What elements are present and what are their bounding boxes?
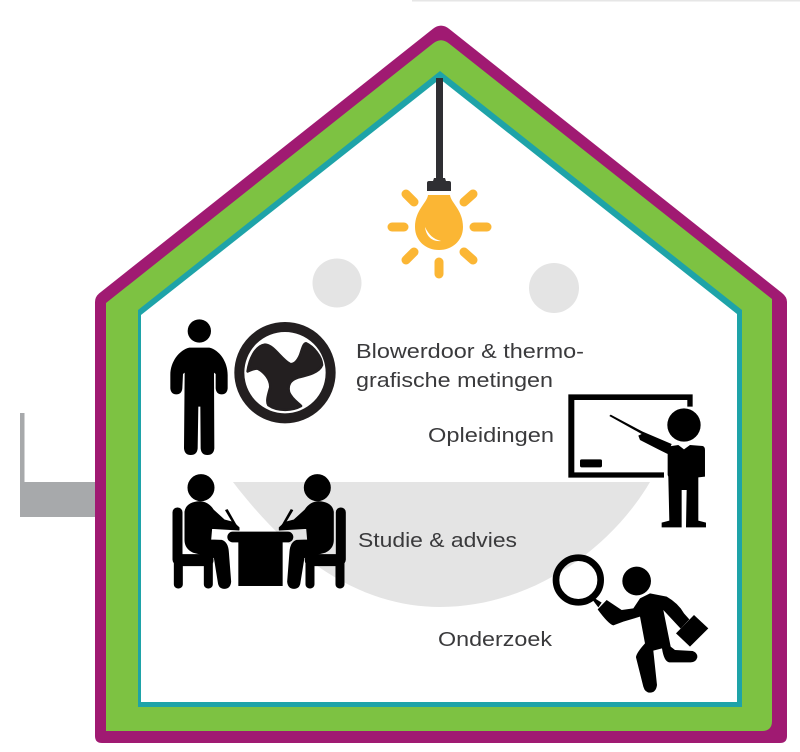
house frame: teal inner layer	[138, 71, 742, 707]
left seated person	[173, 475, 239, 588]
icon: teacher at board	[568, 394, 706, 527]
icon: two people at a table	[173, 475, 345, 588]
icon: blower door fan	[239, 327, 331, 418]
label: grafische metingen: grafische metingen	[356, 369, 553, 392]
label: Blowerdoor: Blowerdoor & thermo-	[356, 340, 584, 363]
grey connector pipe	[20, 413, 96, 517]
grey decorative circle left	[312, 258, 362, 308]
label: Studie & advies: Studie & advies	[358, 529, 517, 552]
house frame: green insulation layer	[106, 40, 772, 731]
right seated person	[279, 475, 345, 588]
grey bowl shape	[233, 482, 650, 607]
label: Onderzoek: Onderzoek	[438, 628, 553, 651]
table	[227, 532, 293, 586]
icon: standing person	[170, 319, 228, 455]
icon: hanging light bulb	[392, 78, 487, 274]
house interior	[141, 79, 737, 702]
grey decorative circle right	[529, 263, 579, 313]
label: Opleidingen: Opleidingen	[428, 424, 554, 447]
icon: person with magnifying glass	[556, 558, 708, 693]
